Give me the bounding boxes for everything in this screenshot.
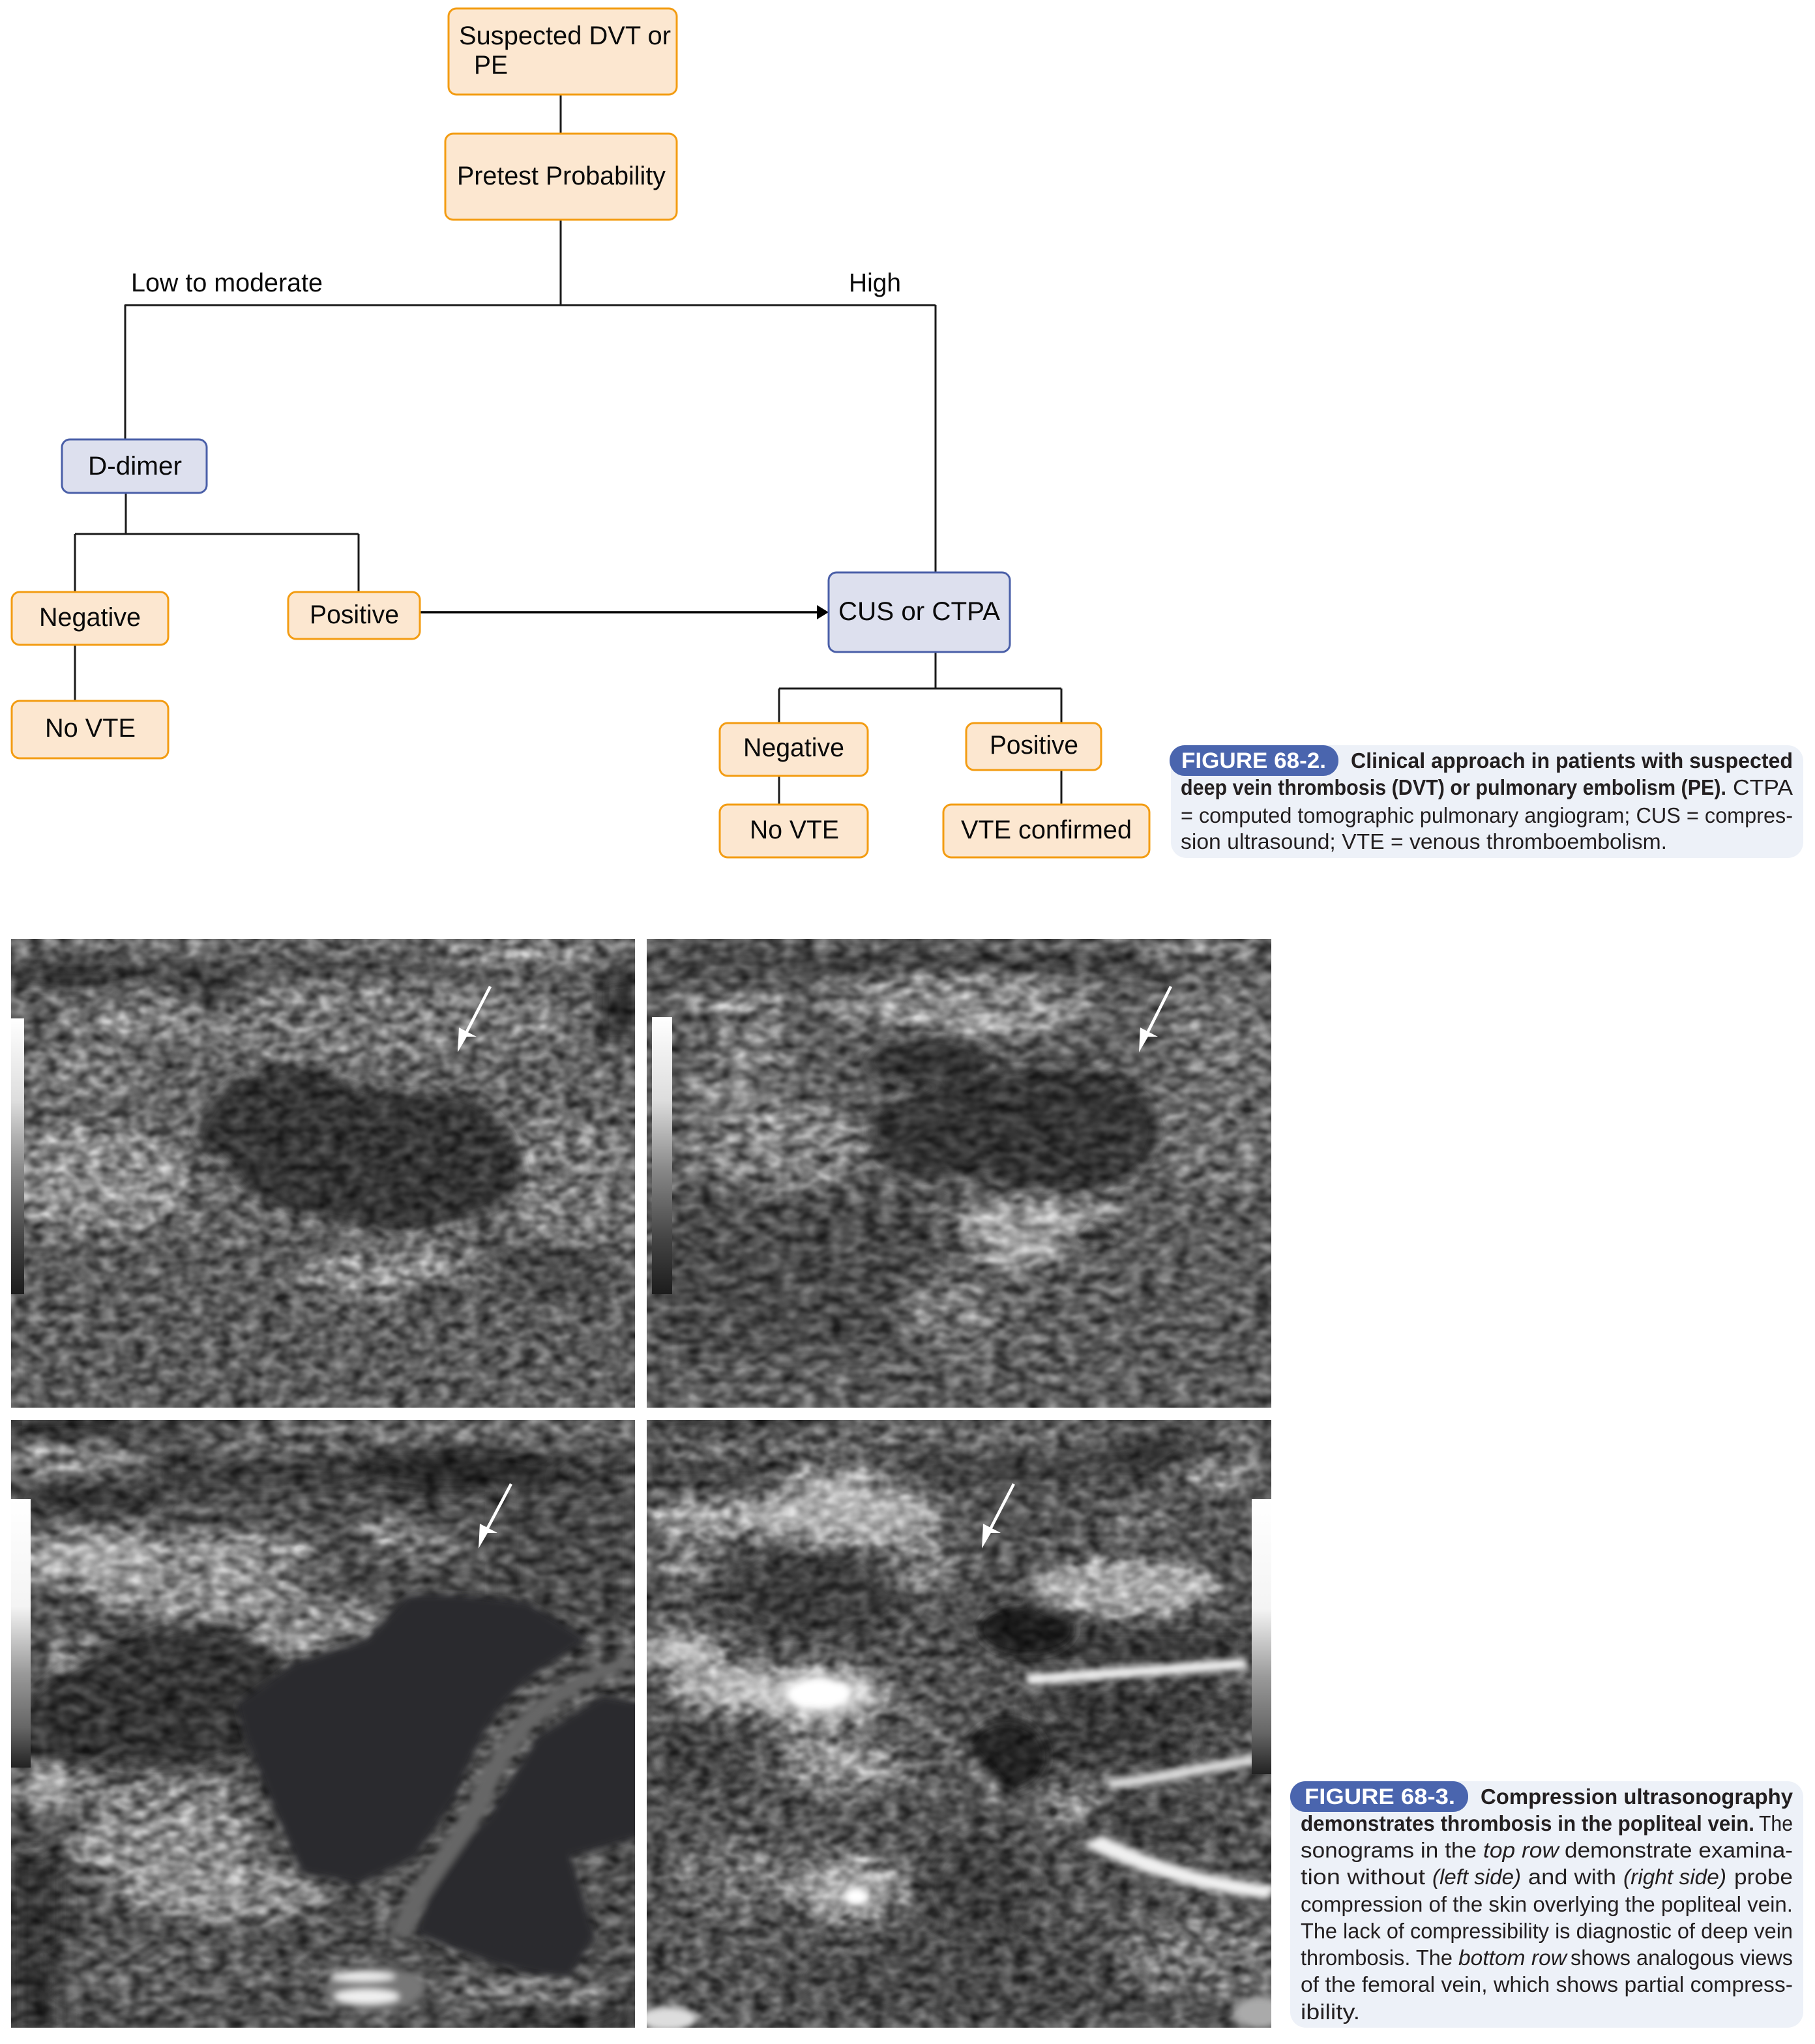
- ultrasound panel: femoral vein with compression: [640, 1420, 1284, 2031]
- box: positive, left branch: [288, 592, 420, 639]
- box: pretest probability: Pretest Probability: [457, 162, 666, 190]
- caption: figure 68-2: sion ultrasound; VTE = venous thromboembolism.: [1181, 829, 1667, 853]
- caption: figure 68-3: [1290, 1781, 1803, 2028]
- caption: figure 68-3: demonstrate examina-: [1565, 1838, 1793, 1862]
- connector lines: [75, 95, 1061, 805]
- ultrasound panel: popliteal vein with compression: [647, 939, 1288, 1408]
- caption: figure 68-3: thrombosis. The: [1301, 1946, 1453, 1970]
- lesion: thrombosed vein: [197, 1066, 522, 1229]
- bright tissue streaks: [640, 1664, 1284, 2031]
- caption: figure 68-3: demonstrates thrombosis in the popliteal vein.: [1301, 1811, 1754, 1835]
- box: negative, right branch: [720, 723, 868, 776]
- caption: figure 68-3: bottom row: [1458, 1946, 1568, 1970]
- box: positive, right branch: [966, 723, 1101, 770]
- box: no VTE, left branch: No VTE: [45, 714, 136, 743]
- scale bar: [1252, 1499, 1271, 1774]
- icon: white arrow: [982, 1484, 1014, 1548]
- caption: figure 68-2: FIGURE 68-2.: [1181, 748, 1326, 773]
- box: suspected DVT or PE: Suspected DVT or: [459, 22, 671, 50]
- box: suspected DVT or PE: PE: [474, 51, 508, 80]
- box: negative, left branch: Negative: [39, 603, 141, 632]
- caption: figure 68-3: ibility.: [1301, 2000, 1360, 2024]
- box: D-dimer: D-dimer: [88, 452, 182, 481]
- caption: figure 68-3: sonograms in the: [1301, 1838, 1477, 1862]
- caption: figure 68-2: [1170, 745, 1803, 858]
- lesion: partly compressed thrombosed vein: [868, 1039, 1157, 1241]
- left lobe of vein: [12, 1627, 286, 1766]
- box: D-dimer: [62, 439, 207, 493]
- label: high: High: [849, 269, 901, 297]
- box: CUS or CTPA: [829, 572, 1010, 652]
- ultrasound panel: popliteal vein without compression: [0, 939, 639, 1410]
- dark regions: femoral vein lumen and adjacent vessel: [236, 1594, 644, 2011]
- caption: figure 68-3: (left side): [1432, 1865, 1521, 1889]
- box: no VTE, right branch: No VTE: [750, 816, 839, 844]
- box: positive, right branch: Positive: [990, 731, 1078, 760]
- scale bar: [652, 1017, 672, 1294]
- box: VTE confirmed: VTE confirmed: [961, 816, 1132, 844]
- box: VTE confirmed: [943, 805, 1149, 857]
- caption: figure 68-3: The: [1759, 1811, 1793, 1835]
- icon: white arrow: [1139, 986, 1171, 1052]
- box: pretest probability: [445, 134, 677, 220]
- caption: figure 68-3: probe: [1734, 1865, 1793, 1889]
- flowchart: clinical approach: [12, 8, 1149, 857]
- caption: figure 68-2: Clinical approach in patients with suspected: [1351, 748, 1793, 773]
- label: low to moderate: Low to moderate: [131, 269, 323, 297]
- caption: figure 68-2: deep vein thrombosis (DVT) or pulmonary embolism (PE).: [1181, 775, 1726, 799]
- box: CUS or CTPA: CUS or CTPA: [838, 597, 1000, 626]
- caption: figure 68-3: (right side): [1623, 1865, 1726, 1889]
- caption: figure 68-3: shows analogous views: [1571, 1946, 1793, 1970]
- ultrasound panel: femoral vein without compression: [0, 1420, 644, 2031]
- caption: figure 68-3: FIGURE 68-3.: [1305, 1785, 1455, 1809]
- box: no VTE, right branch: [720, 805, 868, 857]
- scale bar: [11, 1499, 31, 1768]
- caption: figure 68-3: tion without: [1301, 1865, 1425, 1889]
- icon: white arrow: [479, 1484, 511, 1548]
- box: no VTE, left branch: [12, 701, 168, 758]
- box: suspected DVT or PE: [449, 8, 677, 95]
- caption: figure 68-2: CTPA: [1733, 775, 1793, 799]
- caption: figure 68-3: Compression ultrasonography: [1481, 1785, 1793, 1809]
- icon: white arrow: [458, 986, 490, 1052]
- box: negative, right branch: Negative: [743, 733, 844, 762]
- arrow: positive D-dimer to CUS or CTPA: [421, 605, 829, 619]
- caption: figure 68-3: of the femoral vein, which shows partial compress-: [1301, 1972, 1793, 1996]
- caption: figure 68-3: top row: [1483, 1838, 1560, 1862]
- caption: figure 68-3: and with: [1528, 1865, 1616, 1889]
- caption: figure 68-3: The lack of compressibility is diagnostic of deep vein: [1301, 1919, 1793, 1943]
- box: negative, left branch: [12, 592, 168, 645]
- box: positive, left branch: Positive: [310, 600, 399, 629]
- caption: figure 68-2: = computed tomographic pulmonary angiogram; CUS = compres-: [1181, 803, 1793, 827]
- scale bar: [11, 1018, 24, 1294]
- caption: figure 68-3: compression of the skin overlying the popliteal vein.: [1301, 1892, 1793, 1916]
